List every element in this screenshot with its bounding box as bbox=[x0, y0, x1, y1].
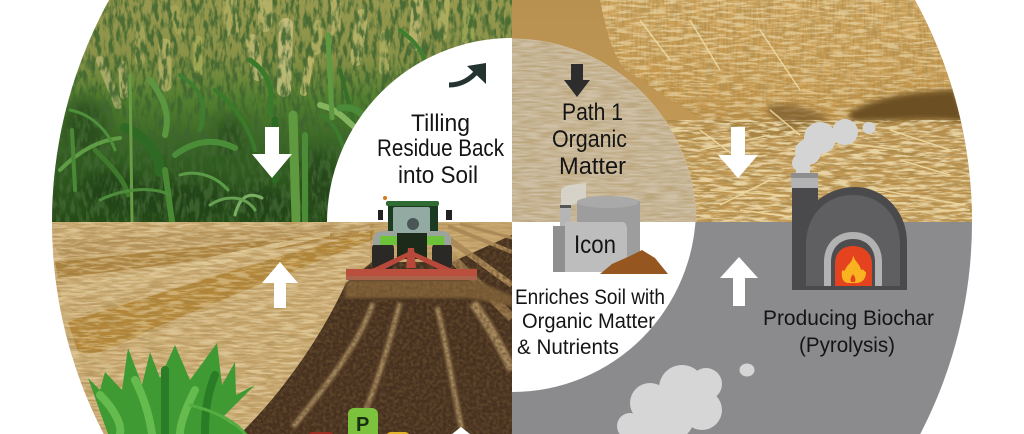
icon: white arrow down straw bbox=[718, 127, 758, 178]
panel: biochar grey area bbox=[512, 222, 972, 434]
icon: biochar furnace bbox=[791, 119, 907, 290]
heading: path 1 organic matter: Matter bbox=[559, 153, 626, 180]
icon: down arrow path 1 bbox=[564, 64, 590, 97]
panel: path 1 upper right translucent bbox=[512, 38, 696, 222]
heading: tilling residue back into soil bbox=[377, 110, 505, 189]
panel: hay bale photo bbox=[512, 0, 974, 222]
heading: path 1 organic matter bbox=[552, 99, 627, 180]
icon: tractor with harrow bbox=[346, 196, 477, 280]
panel: tilled field photo bbox=[50, 222, 512, 434]
hay bale bbox=[600, 0, 965, 138]
text: enriches soil: Enriches Soil with bbox=[515, 286, 665, 309]
icon: phosphorus nutrient badge bbox=[348, 408, 378, 434]
label: icon: Icon bbox=[574, 231, 616, 259]
far rows bbox=[448, 224, 512, 318]
white centre circle lower right bbox=[512, 222, 696, 392]
text: producing biochar bbox=[763, 306, 934, 357]
icon: curved arrow bbox=[449, 63, 486, 85]
icon: white arrow down crop bbox=[252, 127, 292, 178]
straw rows in soil bbox=[293, 303, 512, 430]
dark gaps between stalks bbox=[63, 97, 334, 221]
icon: partial nutrient badge red bbox=[309, 432, 333, 434]
heading: path 1 organic matter: Organic bbox=[552, 126, 627, 153]
harrow bbox=[346, 248, 477, 280]
text: enriches soil: & Nutrients bbox=[517, 336, 619, 359]
panel: crop field photo bbox=[50, 0, 512, 222]
icon: partial white arrow bbox=[452, 427, 470, 434]
text: producing biochar: (Pyrolysis) bbox=[799, 333, 895, 357]
panel: white centre upper left bbox=[327, 38, 512, 222]
tilled soil bbox=[240, 235, 512, 434]
straw floor bbox=[512, 0, 974, 222]
icon: white arrow up field bbox=[262, 262, 298, 308]
young corn plant bbox=[88, 343, 255, 434]
heading: tilling residue back into soil: into Soil bbox=[398, 162, 478, 189]
tassels bbox=[100, 0, 470, 105]
text: enriches soil: Organic Matter bbox=[522, 310, 655, 333]
icon: partial nutrient badge yellow bbox=[386, 432, 410, 434]
text: enriches soil bbox=[515, 286, 665, 359]
field rows bbox=[52, 224, 375, 258]
heading: tilling residue back into soil: Tilling bbox=[411, 110, 470, 137]
icon: white arrow up grey bbox=[720, 257, 758, 306]
icon: biogas digester with soil pile bbox=[553, 183, 668, 274]
straw strands bbox=[640, 20, 970, 218]
text: producing biochar: Producing Biochar bbox=[763, 306, 934, 330]
heading: tilling residue back into soil: Residue Back bbox=[377, 135, 505, 162]
icon: smoke cloud bbox=[617, 364, 754, 434]
heading: path 1 organic matter: Path 1 bbox=[562, 99, 623, 126]
leaves bbox=[60, 30, 424, 222]
